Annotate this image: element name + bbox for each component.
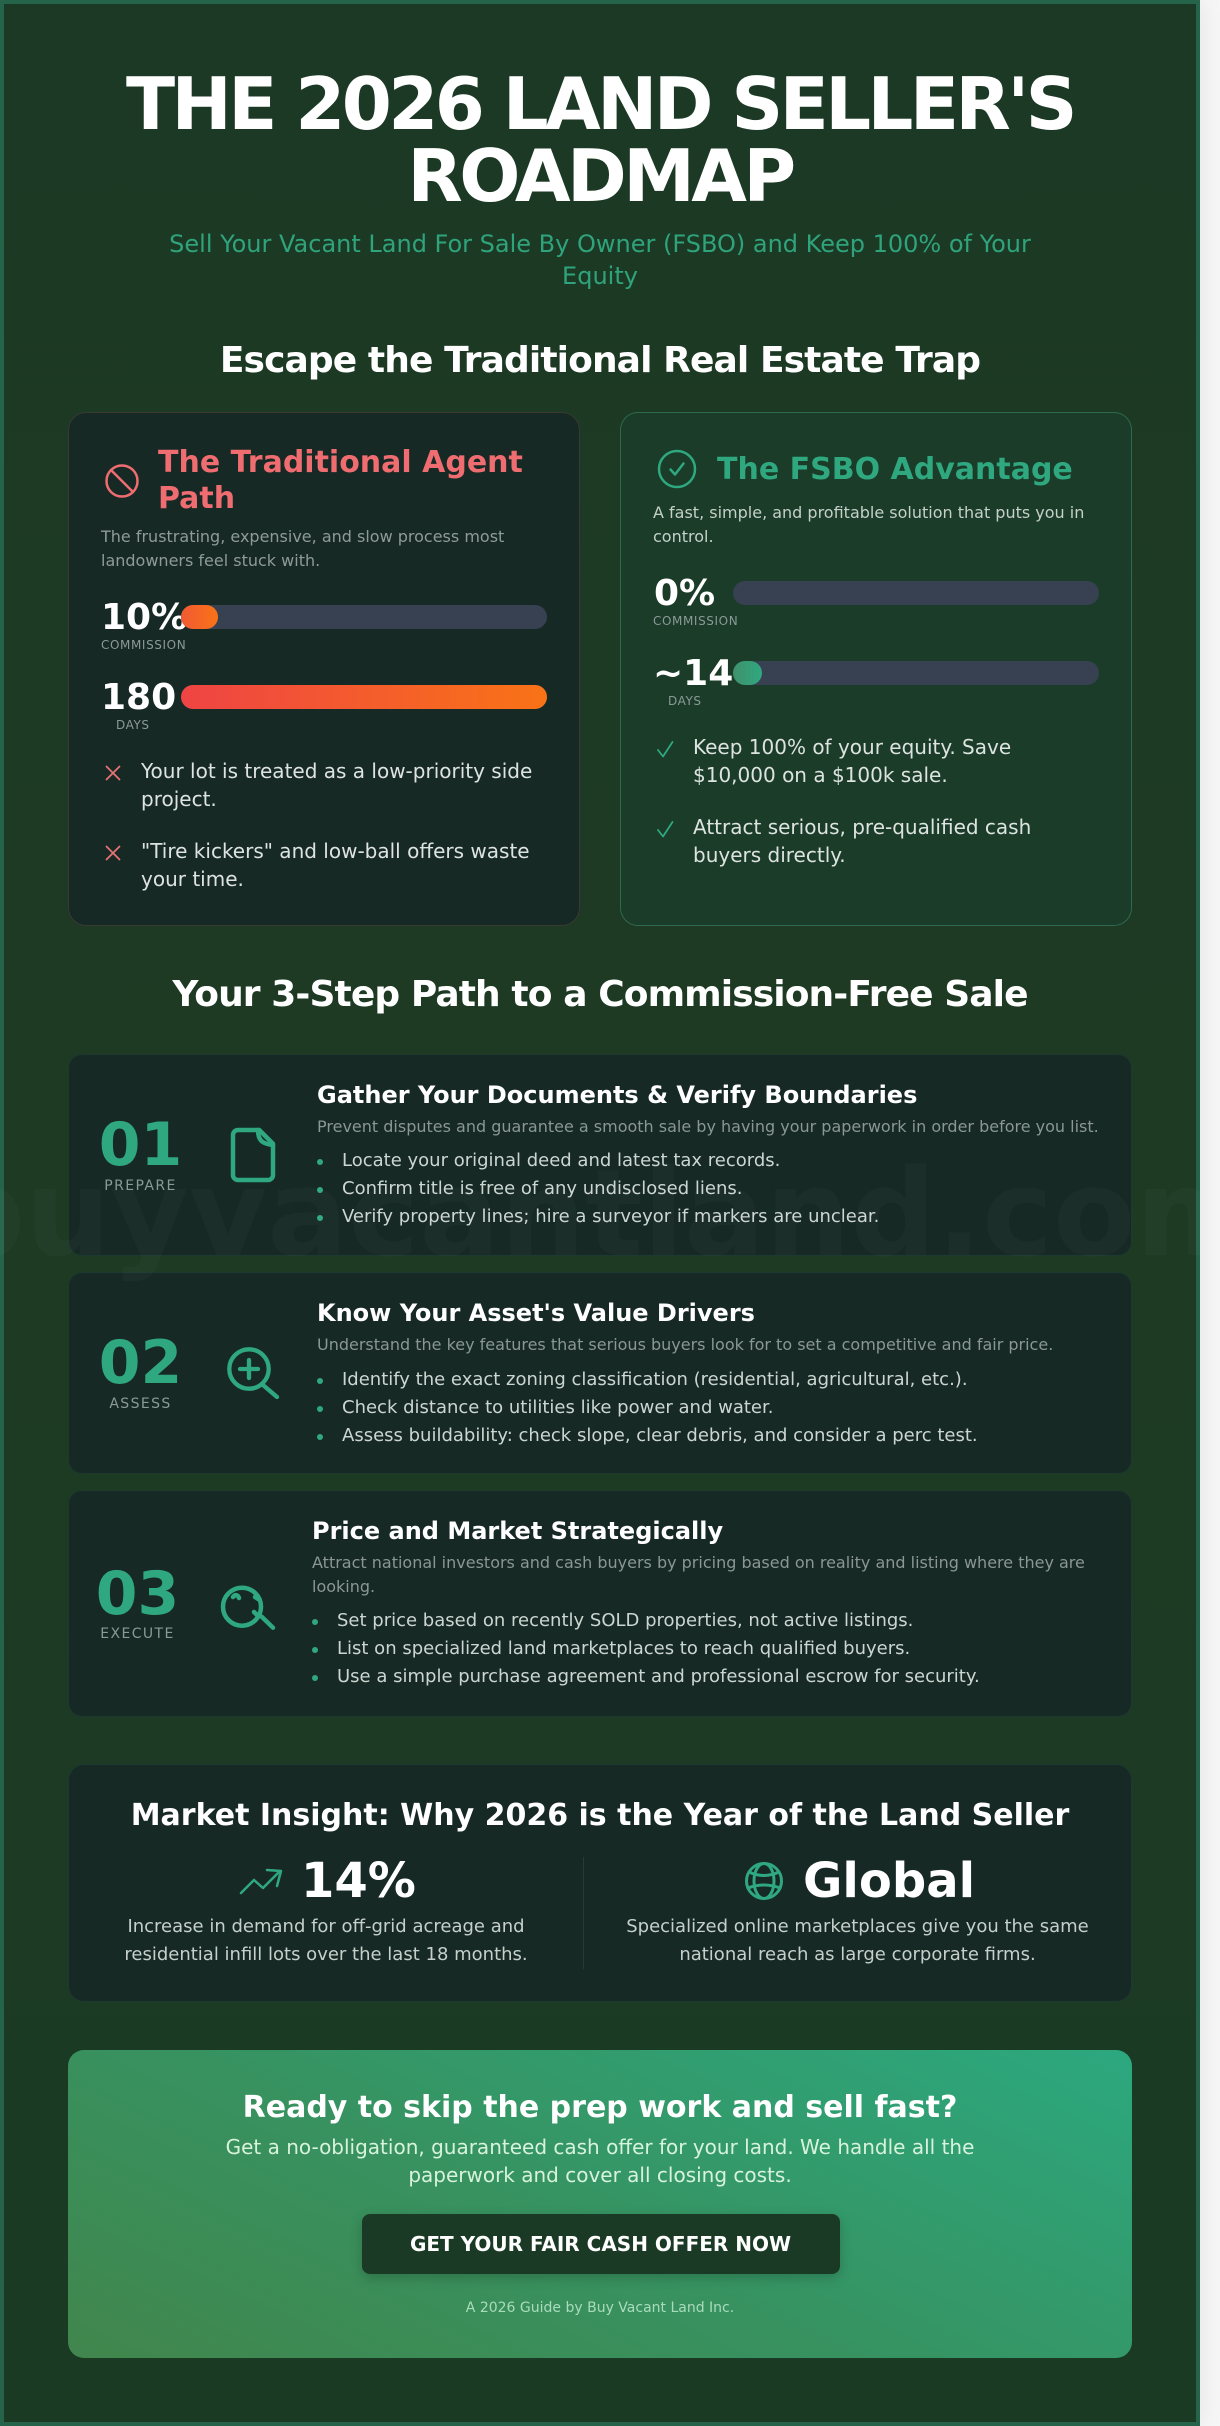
benefit 1: Keep 100% of your equity. Save — [693, 735, 1011, 759]
step description: Attract national investors and cash buyers by pricing based on reality and listing where they are — [312, 1552, 1085, 1572]
icon: ban — [105, 464, 139, 498]
icon: globe — [745, 1862, 783, 1900]
drawback 2 — [106, 839, 530, 891]
step number 02: 02 — [99, 1328, 182, 1398]
benefit 2: buyers directly. — [693, 843, 846, 867]
icon: check — [657, 741, 674, 758]
panel: traditional agent path — [68, 412, 580, 926]
heading: 3-step path: Your 3-Step Path to a Commission-Free Sale — [172, 974, 1028, 1015]
drawback 2: your time. — [141, 867, 244, 891]
title: THE 2026 LAND SELLER'S — [126, 62, 1074, 146]
icon: check circle — [658, 450, 696, 488]
benefit 2: Attract serious, pre-qualified cash — [693, 815, 1031, 839]
CTA button — [362, 2214, 840, 2274]
FSBO heading: The FSBO Advantage — [717, 452, 1073, 486]
benefit 1 — [657, 735, 1011, 787]
icon: cross — [106, 846, 120, 860]
step number 01: 01 — [99, 1110, 182, 1180]
step tag: PREPARE — [104, 1178, 177, 1194]
FSBO description: control. — [653, 527, 714, 546]
benefit 1: $10,000 on a $100k sale. — [693, 763, 948, 787]
step title: Know Your Asset's Value Drivers — [317, 1299, 755, 1327]
CTA button: GET YOUR FAIR CASH OFFER NOW — [410, 2232, 791, 2256]
benefit 2 — [657, 815, 1031, 867]
step description: Understand the key features that serious buyers look for to set a competitive and fair price. — [317, 1334, 1053, 1354]
panel: FSBO advantage — [620, 412, 1132, 926]
insight heading: Market Insight: Why 2026 is the Year of the Land Seller — [131, 1798, 1069, 1833]
agent path description — [100, 526, 504, 570]
icon: document — [230, 1128, 276, 1182]
agent path description: The frustrating, expensive, and slow process most — [101, 526, 504, 546]
stat: global reach: Global — [803, 1853, 975, 1909]
stat: 14 days: DAYS — [668, 694, 702, 708]
CTA text: Get a no-obligation, guaranteed cash offer for your land. We handle all the — [226, 2135, 974, 2159]
stat: 180 days: 180 — [101, 676, 176, 718]
title: ROADMAP — [407, 134, 793, 218]
step number 03: 03 — [96, 1559, 179, 1629]
drawback 1: project. — [141, 787, 217, 811]
stat: global reach — [626, 1853, 1089, 1965]
step checklist: Locate your original deed and latest tax records. — [342, 1150, 780, 1171]
step description: looking. — [312, 1576, 375, 1596]
stat: global reach: national reach as large corporate firms. — [679, 1944, 1036, 1965]
footer note: A 2026 Guide by Buy Vacant Land Inc. — [466, 2300, 734, 2316]
step checklist: Confirm title is free of any undisclosed liens. — [342, 1178, 742, 1199]
step checklist: Assess buildability: check slope, clear debris, and consider a perc test. — [342, 1424, 978, 1446]
step description — [312, 1552, 1085, 1596]
CTA heading: Ready to skip the prep work and sell fast? — [243, 2090, 957, 2125]
FSBO description: A fast, simple, and profitable solution that puts you in — [653, 503, 1084, 522]
agent path heading: Path — [158, 481, 235, 516]
CTA text — [226, 2135, 974, 2187]
subtitle: Sell Your Vacant Land For Sale By Owner (FSBO) and Keep 100% of Your — [169, 230, 1031, 258]
icon: trending up — [240, 1868, 282, 1894]
stat: 0% commission: COMMISSION — [653, 614, 738, 628]
stat: 180 days — [101, 676, 547, 732]
panel: market insight — [68, 1764, 1132, 2002]
step title: Price and Market Strategically — [312, 1517, 723, 1545]
stat: 10% commission: COMMISSION — [101, 638, 186, 652]
heading: escape the trap: Escape the Traditional Real Estate Trap — [220, 340, 980, 381]
stat: 14 days: ~14 — [653, 652, 733, 694]
stat: global reach: Specialized online marketplaces give you the same — [626, 1916, 1089, 1937]
icon: zoom in — [227, 1347, 280, 1400]
stat: 180 days: DAYS — [116, 718, 150, 732]
stat: 10% commission — [101, 596, 547, 652]
panel: step 2 — [68, 1272, 1132, 1474]
title — [126, 62, 1074, 218]
step title: Gather Your Documents & Verify Boundaries — [317, 1081, 917, 1109]
step checklist: Use a simple purchase agreement and professional escrow for security. — [337, 1666, 980, 1687]
stat: 14% demand — [124, 1853, 528, 1965]
agent path heading: The Traditional Agent — [158, 445, 523, 480]
panel: step 1 — [68, 1054, 1132, 1256]
drawback 1 — [106, 759, 532, 811]
agent path heading — [158, 445, 523, 516]
stat: 0% commission — [653, 572, 1099, 628]
step tag: ASSESS — [109, 1396, 172, 1412]
panel: step 3 — [68, 1490, 1132, 1717]
drawback 1: Your lot is treated as a low-priority side — [141, 759, 532, 783]
step checklist: Verify property lines; hire a surveyor if markers are unclear. — [342, 1206, 879, 1227]
stat: 0% commission: 0% — [654, 572, 715, 614]
step checklist — [317, 1368, 978, 1446]
step checklist: List on specialized land marketplaces to reach qualified buyers. — [337, 1638, 910, 1659]
icon: check — [657, 821, 674, 838]
divider — [583, 1857, 584, 1969]
step checklist — [317, 1150, 879, 1227]
step checklist — [312, 1610, 980, 1687]
CTA text: paperwork and cover all closing costs. — [408, 2163, 792, 2187]
stat: 14 days — [653, 652, 1099, 708]
subtitle: Equity — [562, 262, 638, 290]
stat: 14% demand: Increase in demand for off-grid acreage and — [127, 1916, 525, 1937]
icon: cross — [106, 766, 120, 780]
FSBO description — [653, 503, 1084, 546]
step checklist: Set price based on recently SOLD properties, not active listings. — [337, 1610, 913, 1631]
step checklist: Identify the exact zoning classification (residential, agricultural, etc.). — [342, 1368, 968, 1390]
stat: 14% demand: 14% — [301, 1853, 416, 1909]
stat: 14% demand: residential infill lots over the last 18 months. — [124, 1944, 528, 1965]
step tag: EXECUTE — [100, 1626, 175, 1642]
step checklist: Check distance to utilities like power and water. — [342, 1396, 773, 1418]
agent path description: landowners feel stuck with. — [101, 550, 320, 570]
step description: Prevent disputes and guarantee a smooth sale by having your paperwork in order before you list. — [317, 1116, 1099, 1136]
stat: 10% commission: 10% — [101, 596, 187, 638]
icon: search — [220, 1586, 276, 1630]
subtitle — [169, 230, 1031, 290]
drawback 2: "Tire kickers" and low-ball offers waste — [141, 839, 530, 863]
panel: call to action — [68, 2050, 1132, 2358]
